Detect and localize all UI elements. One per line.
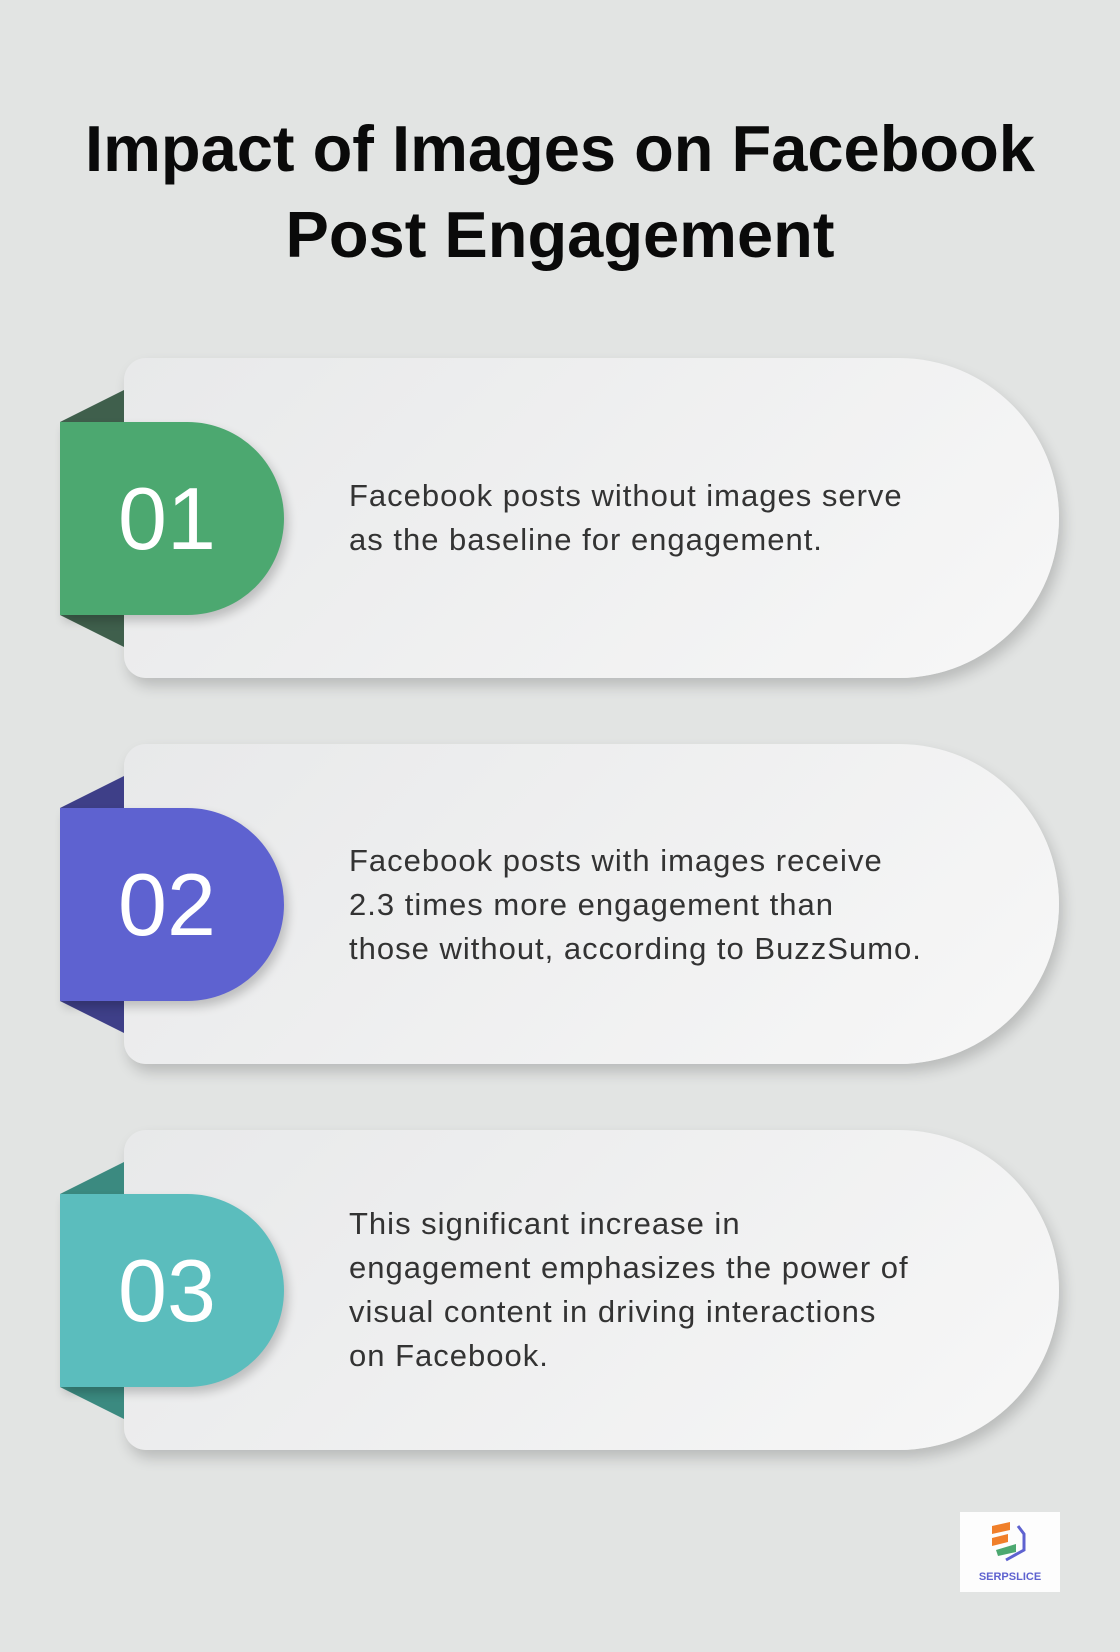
text 2: Facebook posts with images receive — [349, 843, 883, 878]
tab 01 — [60, 422, 284, 615]
text 3: This significant increase in — [349, 1206, 741, 1241]
text 2 — [349, 843, 922, 966]
text 1 — [349, 478, 903, 557]
text 3 — [349, 1206, 909, 1373]
title: Post Engagement — [286, 198, 834, 271]
fold 3 — [60, 1162, 124, 1419]
panel: card 1 — [124, 358, 1059, 678]
text 3: on Facebook. — [349, 1338, 549, 1373]
text 1: Facebook posts without images serve — [349, 478, 903, 513]
panel: card 2 — [124, 744, 1059, 1064]
panel: card 3 — [124, 1130, 1059, 1450]
tab 03: 03 — [118, 1241, 216, 1340]
tab 01: 01 — [118, 469, 216, 568]
tab 02 — [60, 808, 284, 1001]
logo: SERPSLICE — [979, 1571, 1041, 1583]
tab 02: 02 — [118, 855, 216, 954]
text 3: engagement emphasizes the power of — [349, 1250, 909, 1285]
text 2: 2.3 times more engagement than — [349, 887, 834, 922]
fold 1 — [60, 390, 124, 647]
fold 2 — [60, 776, 124, 1033]
text 1: as the baseline for engagement. — [349, 522, 823, 557]
tab 03 — [60, 1194, 284, 1387]
title — [85, 112, 1035, 271]
text 3: visual content in driving interactions — [349, 1294, 876, 1329]
logo — [960, 1512, 1060, 1592]
title: Impact of Images on Facebook — [85, 112, 1035, 185]
text 2: those without, according to BuzzSumo. — [349, 931, 922, 966]
